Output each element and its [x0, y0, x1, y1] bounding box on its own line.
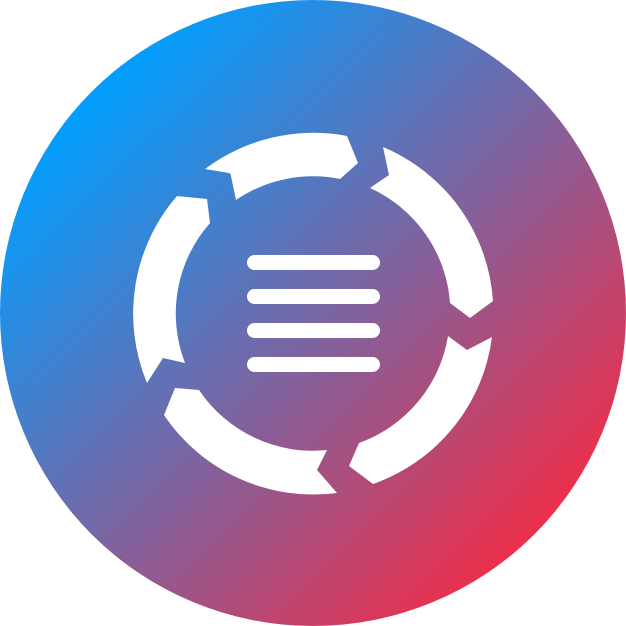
circular arrow cycle — [133, 133, 493, 495]
arrow segment: right — [370, 147, 493, 318]
list icon lines — [247, 255, 380, 372]
list line 3 — [247, 323, 380, 338]
arrow segment: top — [205, 133, 358, 200]
list line 4 — [247, 357, 380, 372]
arrow segment: left — [133, 196, 210, 383]
list line 1 — [247, 255, 380, 270]
arrow segment: bottom — [164, 388, 337, 495]
arrow segment: lower right — [349, 336, 492, 484]
list line 2 — [247, 289, 380, 304]
